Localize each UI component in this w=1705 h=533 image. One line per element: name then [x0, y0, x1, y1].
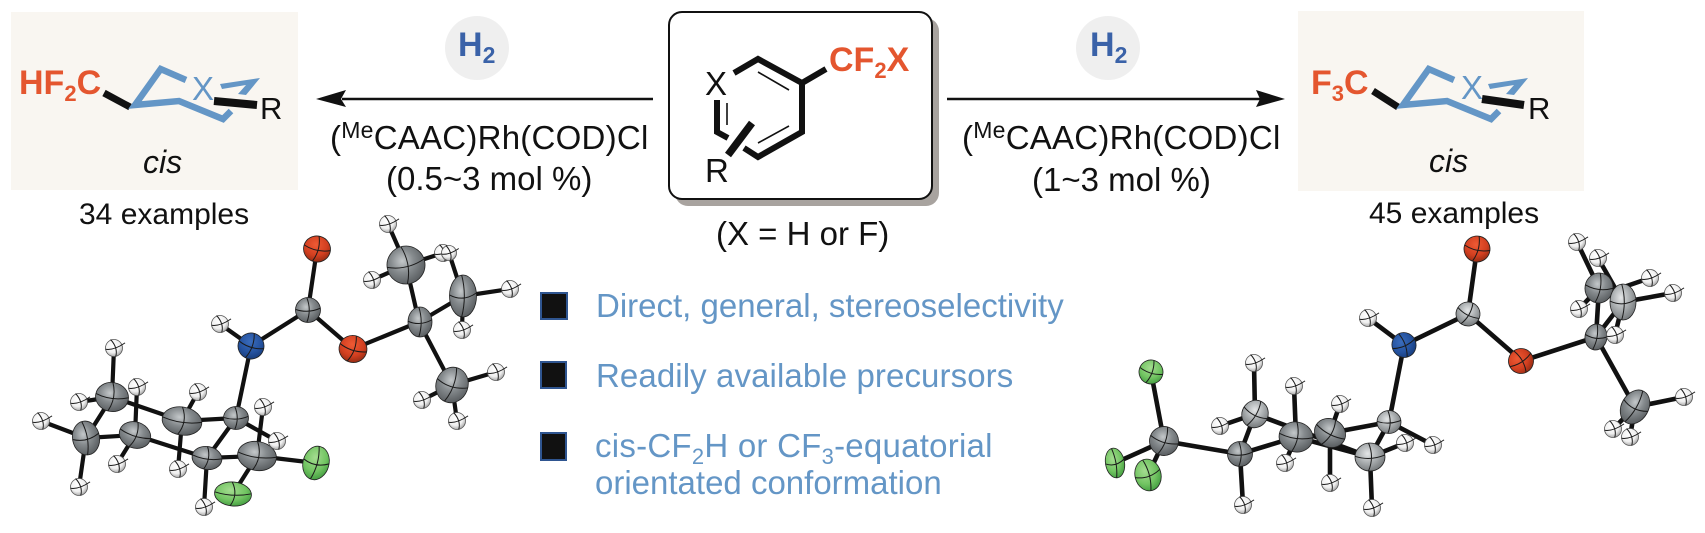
label: R: R — [260, 91, 282, 126]
catalyst: left: (0.5~3 mol %) — [386, 160, 592, 197]
label: CF2X: 2 — [874, 58, 887, 83]
catalyst: right: ( — [962, 119, 973, 156]
label: F3C group: F — [1311, 64, 1332, 102]
label: 45 examples: 45 examples — [1369, 197, 1539, 230]
feature 3: orientated conformation — [595, 464, 942, 501]
catalyst: left: CAAC)Rh(COD)Cl — [374, 119, 649, 156]
reagent: left H2 — [445, 16, 509, 80]
bullet 1 — [541, 293, 567, 319]
bond: HF2C to ring — [104, 93, 130, 107]
label: HF2C group: HF — [19, 64, 64, 102]
crystal structure: left — [32, 216, 521, 516]
label: R: R — [705, 152, 729, 189]
catalyst: right: (1~3 mol %) — [1032, 161, 1211, 198]
label: X: X — [1461, 69, 1483, 106]
label: cis: cis — [143, 144, 182, 180]
bond: ring to R — [214, 101, 257, 105]
ring: left piperidine chair — [135, 69, 260, 119]
label: R: R — [1528, 91, 1550, 126]
label: CF2X: CF — [829, 41, 874, 79]
label: F3C group: 3 — [1332, 81, 1344, 106]
feature 3: 3 — [822, 444, 834, 469]
reagent: left H2: H — [458, 26, 483, 64]
feature 1: Direct, general, stereoselectivity — [596, 287, 1064, 324]
feature 3: cis-CF — [595, 427, 692, 464]
feature 3: H or CF — [704, 427, 822, 464]
arrow: right reaction — [947, 90, 1285, 107]
catalyst: right: CAAC)Rh(COD)Cl — [1006, 119, 1281, 156]
catalyst: right: Me — [973, 117, 1006, 143]
label: X: X — [192, 70, 214, 107]
reagent: left H2: 2 — [483, 42, 495, 68]
reagent: right H2 — [1076, 16, 1140, 80]
list: key features — [541, 287, 1064, 501]
catalyst: right — [962, 117, 1281, 198]
bullet 2 — [541, 362, 566, 388]
structure: aromatic ring — [717, 59, 826, 157]
bond: F3C to ring — [1373, 91, 1398, 107]
label: HF2C group: C — [77, 64, 101, 102]
reagent: right H2: 2 — [1115, 42, 1127, 68]
bond: ring to R — [1482, 99, 1524, 105]
feature 3: 2 — [692, 444, 704, 469]
arrow: left reaction — [316, 90, 653, 107]
catalyst: left: ( — [330, 119, 341, 156]
catalyst: left — [330, 117, 649, 197]
feature 3 — [595, 427, 993, 501]
ring: right piperidine chair — [1403, 69, 1528, 119]
panel: right product — [1298, 11, 1584, 191]
bullet 3 — [541, 433, 566, 460]
feature 2: Readily available precursors — [596, 357, 1013, 394]
label: cis: cis — [1429, 143, 1468, 179]
label: 34 examples: 34 examples — [79, 198, 249, 231]
label: HF2C group: 2 — [64, 81, 77, 106]
label: X: X — [705, 65, 727, 102]
label: F3C group: C — [1344, 64, 1369, 102]
panel: left product — [11, 12, 298, 190]
catalyst: left: Me — [341, 117, 374, 143]
reagent: right H2: H — [1090, 26, 1115, 64]
panel: substrate box — [669, 12, 939, 206]
crystal structure: right — [1103, 233, 1695, 517]
label: CF2X: X — [887, 41, 910, 79]
feature 3: -equatorial — [834, 427, 993, 464]
label: X = H or F: (X = H or F) — [716, 215, 889, 252]
